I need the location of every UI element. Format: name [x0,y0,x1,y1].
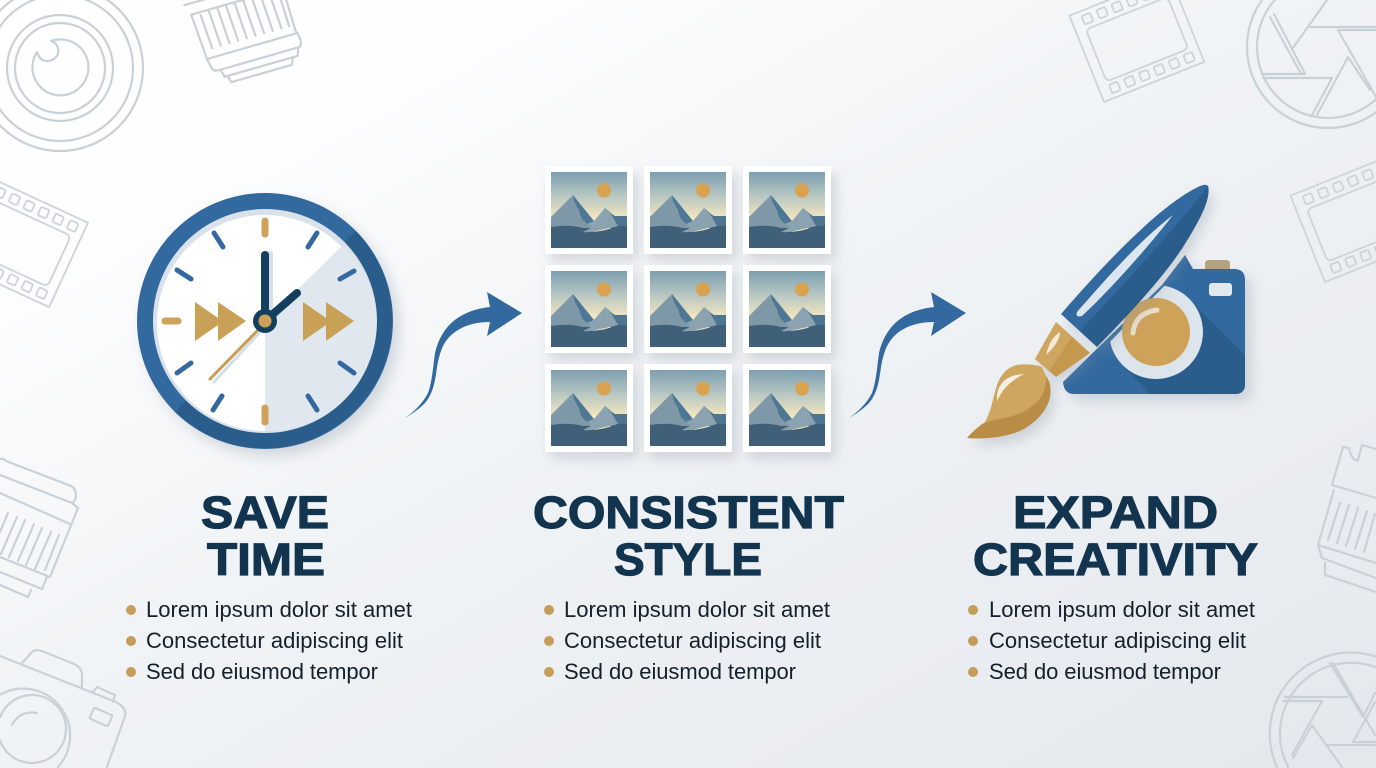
icon: outline lens top-left [0,0,143,151]
arrow: grid to brush [849,292,966,418]
tile 3 [743,166,831,254]
tile 6 [743,265,831,353]
bullet list: save time [126,597,412,684]
icon: outline film right [1290,156,1376,282]
bullet list: expand creativity: Sed do eiusmod tempor [989,659,1221,684]
tile 1 [545,166,633,254]
bullet list: consistent style: Sed do eiusmod tempor [564,659,796,684]
brush bristles [967,364,1050,438]
fast-forward left [195,302,246,341]
fast-forward right [303,302,354,341]
shutter button [1205,260,1230,269]
camera shade [1125,300,1245,394]
icon: outline lens barrel bottom-right [1318,445,1376,592]
arrow: clock to grid [405,292,522,418]
tile 5 [644,265,732,353]
heading: expand creativity: EXPAND [1013,487,1218,538]
lens [1122,298,1190,366]
bullet list: save time: Sed do eiusmod tempor [146,659,378,684]
heading: expand creativity [973,487,1258,585]
tile 8 [644,364,732,452]
image grid [545,166,831,452]
tile 7 [545,364,633,452]
bullet list: expand creativity: Lorem ipsum dolor sit amet [989,597,1255,622]
heading: consistent style: STYLE [614,534,762,585]
heading: expand creativity: CREATIVITY [973,534,1258,585]
icon: paint brush [967,185,1209,438]
heading: consistent style [533,487,844,585]
tile 4 [545,265,633,353]
heading: save time: SAVE [201,487,329,538]
clock ticks [165,221,354,422]
heading: consistent style: CONSISTENT [533,487,844,538]
tile 9 [743,364,831,452]
icon: outline film top-right [1069,0,1204,102]
bullet list: save time: Lorem ipsum dolor sit amet [146,597,412,622]
icon: outline camera bottom-left [0,650,125,767]
icon: outline shutter top-right [1247,0,1376,128]
brush handle [1061,185,1209,347]
bullet list: expand creativity: Consectetur adipiscing elit [989,628,1246,653]
bullet list: consistent style [544,597,830,684]
icon: outline shutter bottom-right [1270,653,1375,767]
icon: clock with fast-forward [137,193,393,449]
bullet list: save time: Consectetur adipiscing elit [146,628,403,653]
flash window [1209,283,1232,296]
brush ferrule [1035,322,1090,377]
icon: camera [1063,255,1245,394]
icon: outline lens barrel bottom-left [0,459,78,597]
heading: save time [201,487,329,585]
icon: outline film left [0,178,88,307]
tile 2 [644,166,732,254]
clock hands [210,254,297,382]
bullet list: consistent style: Consectetur adipiscing elit [564,628,821,653]
lens ring [1109,285,1203,379]
heading: save time: TIME [207,534,325,585]
bullet list: expand creativity [968,597,1255,684]
icon: outline lens barrel top [183,0,306,89]
bullet list: consistent style: Lorem ipsum dolor sit amet [564,597,830,622]
